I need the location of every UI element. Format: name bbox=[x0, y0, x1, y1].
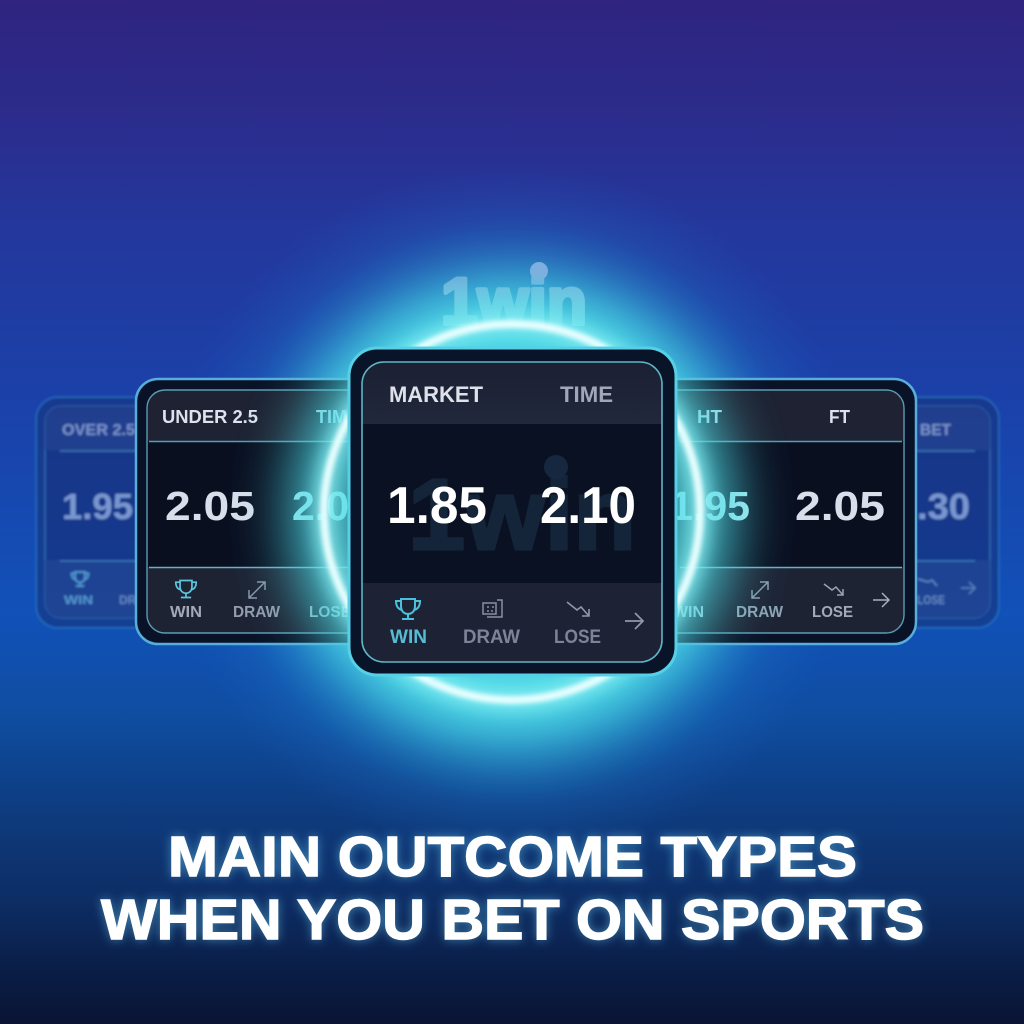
panel: far right card: .30 bbox=[917, 486, 970, 527]
right card footer labels bbox=[673, 604, 853, 621]
left card odds bbox=[165, 483, 372, 529]
left card footer labels: LOSE bbox=[309, 604, 351, 621]
panel: far left card bbox=[34, 396, 136, 630]
right card footer labels: DRAW bbox=[736, 604, 784, 621]
panel: left side card bbox=[134, 378, 348, 646]
1win logo above ring: 1win bbox=[441, 264, 587, 338]
panel: far left card: DR bbox=[119, 593, 137, 607]
right card header labels: HT bbox=[697, 407, 722, 427]
left card header labels bbox=[162, 407, 347, 427]
center card odds: 2.10 bbox=[540, 477, 636, 535]
panel: far right card: LOSE bbox=[917, 593, 945, 607]
panel: far right card bbox=[916, 396, 1000, 630]
panel: right side card bbox=[678, 378, 918, 646]
panel: far left card: WIN bbox=[64, 593, 93, 607]
right card header labels: FT bbox=[829, 407, 850, 427]
right card header labels bbox=[697, 407, 850, 427]
title bbox=[101, 825, 924, 952]
center card odds bbox=[387, 477, 636, 535]
icon: draw board bbox=[483, 600, 502, 617]
center card odds: 1.85 bbox=[387, 477, 487, 535]
icon: trophy bbox=[396, 599, 420, 619]
icon: arrow bbox=[873, 593, 889, 607]
glowing ring bbox=[324, 324, 700, 700]
left card header labels: TIM bbox=[316, 407, 347, 427]
center card footer labels bbox=[390, 627, 601, 648]
left card header labels: UNDER 2.5 bbox=[162, 407, 258, 427]
title: MAIN OUTCOME TYPES bbox=[168, 825, 857, 889]
panel: far left card: 1.95 bbox=[62, 486, 133, 527]
left card odds: 2.05 bbox=[165, 483, 255, 529]
icon: trophy bbox=[176, 580, 196, 598]
icon: arrow bbox=[625, 613, 643, 629]
halo glow behind cards bbox=[162, 162, 862, 862]
right card footer labels: WIN bbox=[673, 604, 704, 621]
icon: losing trend bbox=[567, 602, 589, 616]
right card odds: 2.05 bbox=[795, 483, 885, 529]
icon: losing trend bbox=[824, 584, 843, 595]
center card header labels bbox=[389, 382, 613, 407]
panel: far left card: OVER 2.5 bbox=[62, 422, 135, 439]
center card footer labels: LOSE bbox=[554, 627, 601, 648]
icon: draw arrows bbox=[249, 582, 265, 598]
center card header labels: TIME bbox=[560, 382, 613, 407]
panel: far right card: BET bbox=[920, 422, 951, 439]
watermark: 1win: 1win bbox=[408, 459, 636, 571]
title: WHEN YOU BET ON SPORTS bbox=[101, 888, 924, 952]
left card footer labels: WIN bbox=[170, 604, 202, 621]
center card footer labels: DRAW bbox=[463, 627, 520, 648]
left card odds: 2.05 bbox=[292, 483, 372, 529]
center card footer labels: WIN bbox=[390, 627, 427, 648]
icon: draw arrows bbox=[752, 582, 768, 598]
left card footer labels: DRAW bbox=[233, 604, 281, 621]
right card odds bbox=[670, 483, 885, 529]
panel: center card bbox=[349, 348, 676, 675]
right card footer labels: LOSE bbox=[812, 604, 853, 621]
right card odds: 1.95 bbox=[670, 483, 750, 529]
center card header labels: MARKET bbox=[389, 382, 484, 407]
left card footer labels bbox=[170, 604, 351, 621]
